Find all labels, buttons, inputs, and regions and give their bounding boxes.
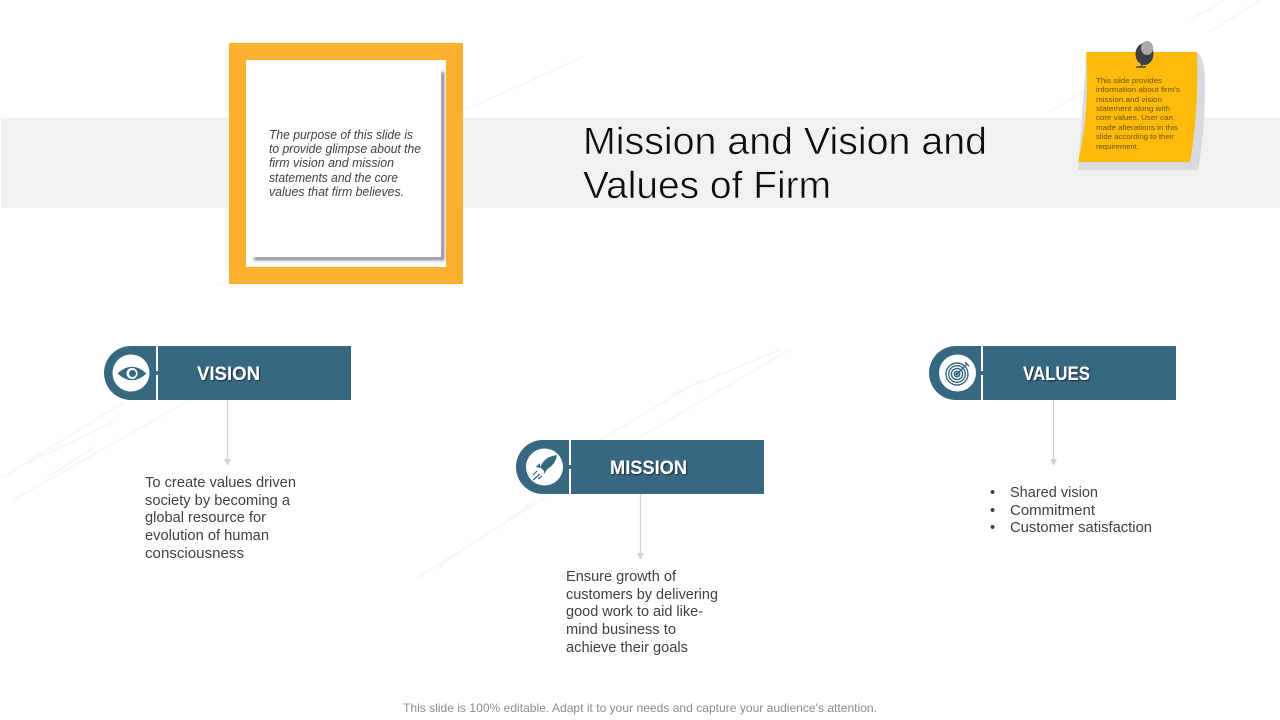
values header: VALUES [1023,364,1090,385]
vision header [104,346,351,400]
sticky note text: This slide provides [1096,76,1162,85]
panel: values [929,346,1176,536]
icon: rocket [533,455,557,480]
vision text: evolution of human [145,528,269,544]
vision text: global resource for [145,510,266,526]
mission header [516,440,764,494]
mission text: customers by delivering [566,587,718,603]
values list: Shared vision [1010,485,1098,501]
mission text: good work to aid like- [566,604,703,620]
values list: Commitment [1010,503,1095,519]
icon: eye [118,367,146,380]
values header [929,346,1176,400]
mission text [566,569,718,656]
sticky note text: statement along with [1096,104,1170,113]
title: Values of Firm [583,165,831,207]
panel: mission [516,440,764,656]
mission text: Ensure growth of [566,569,677,585]
sticky note text: slide according to their [1096,132,1175,141]
title [583,121,987,207]
icon: push pin [1136,41,1154,67]
footer note: This slide is 100% editable. Adapt it to your needs and capture your audience's attention. [403,701,877,715]
sticky note text: made alterations in this [1096,123,1178,132]
arrow: vision [224,400,231,466]
icon: target [946,362,969,385]
sticky note text [1096,76,1180,151]
panel: vision [104,346,351,562]
purpose text [269,128,421,199]
purpose text: statements and the core [269,171,398,185]
sticky note text: requirement. [1096,142,1139,151]
arrow: mission [637,494,644,560]
purpose text: values that firm believes. [269,185,404,199]
vision text: society by becoming a [145,493,291,509]
mission text: mind business to [566,622,676,638]
values list: • [990,485,995,501]
mission header: MISSION [610,458,687,479]
sticky note text: core values. User can [1096,113,1173,122]
purpose text: to provide glimpse about the [269,142,421,156]
panel: purpose statement [229,43,463,284]
sticky note text: mission and vision [1096,95,1162,104]
vision text: consciousness [145,546,244,562]
arrow: values [1050,400,1057,466]
vision text [145,475,296,562]
sticky note [1078,41,1205,170]
sticky note text: information about firm's [1096,85,1180,94]
values list [990,485,1152,536]
vision header: VISION [197,364,260,385]
mission text: achieve their goals [566,640,688,656]
values list: • [990,503,995,519]
values list: • [990,520,995,536]
title: Mission and Vision and [583,121,987,163]
vision text: To create values driven [145,475,296,491]
values list: Customer satisfaction [1010,520,1152,536]
title band [1,118,1280,208]
purpose text: The purpose of this slide is [269,128,413,142]
purpose text: firm vision and mission [269,156,394,170]
